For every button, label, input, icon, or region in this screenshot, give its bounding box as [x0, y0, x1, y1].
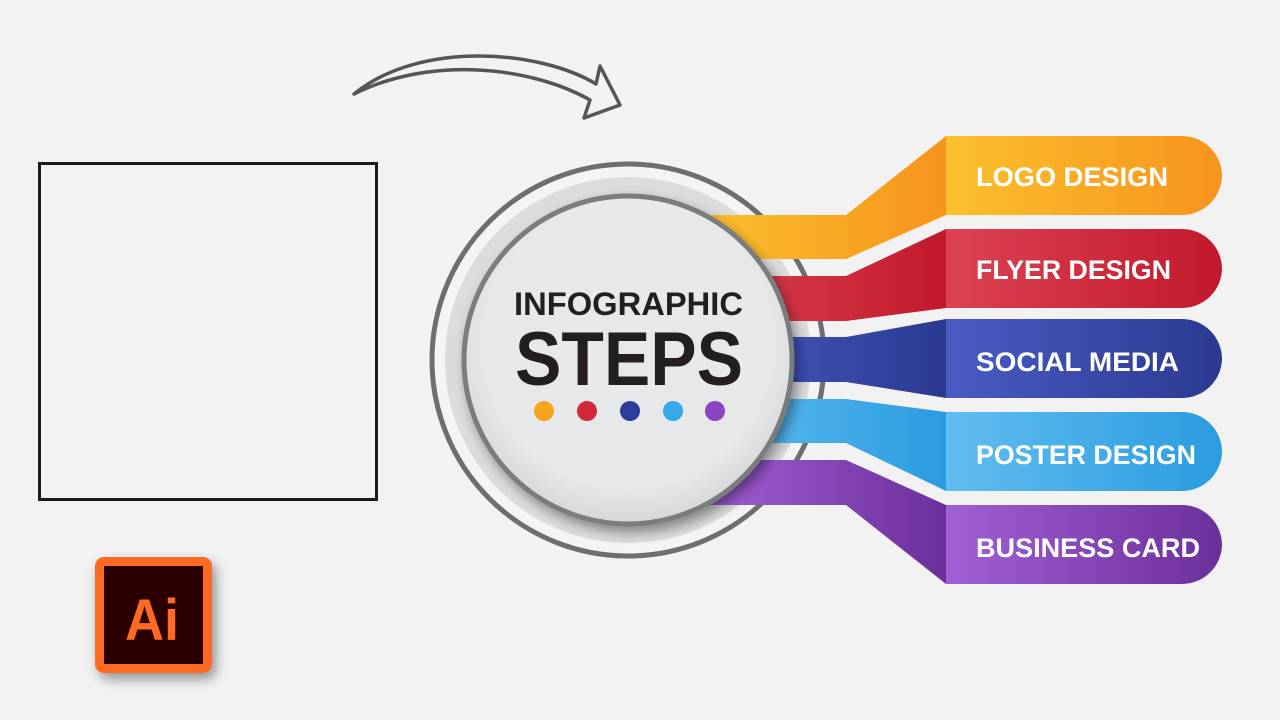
icon: Adobe Illustrator: Ai — [125, 588, 179, 653]
arrow — [354, 56, 620, 118]
label: FLYER DESIGN — [946, 229, 1222, 308]
label: BUSINESS CARD: BUSINESS CARD — [976, 533, 1200, 563]
inner circle title: STEPS — [515, 317, 743, 402]
label: POSTER DESIGN — [946, 412, 1222, 491]
label: SOCIAL MEDIA — [946, 319, 1222, 398]
label: POSTER DESIGN: POSTER DESIGN — [976, 440, 1196, 470]
icon: Adobe Illustrator — [95, 557, 212, 673]
label: LOGO DESIGN: LOGO DESIGN — [976, 162, 1168, 192]
label: FLYER DESIGN: FLYER DESIGN — [976, 255, 1171, 285]
label: SOCIAL MEDIA: SOCIAL MEDIA — [976, 347, 1179, 377]
inner circle title — [464, 196, 792, 524]
empty square frame — [40, 164, 376, 500]
outer ring — [432, 164, 824, 556]
label: LOGO DESIGN — [946, 136, 1222, 215]
label: BUSINESS CARD — [946, 505, 1222, 584]
connector bars — [700, 136, 946, 584]
inner circle title: INFOGRAPHIC — [514, 286, 743, 322]
